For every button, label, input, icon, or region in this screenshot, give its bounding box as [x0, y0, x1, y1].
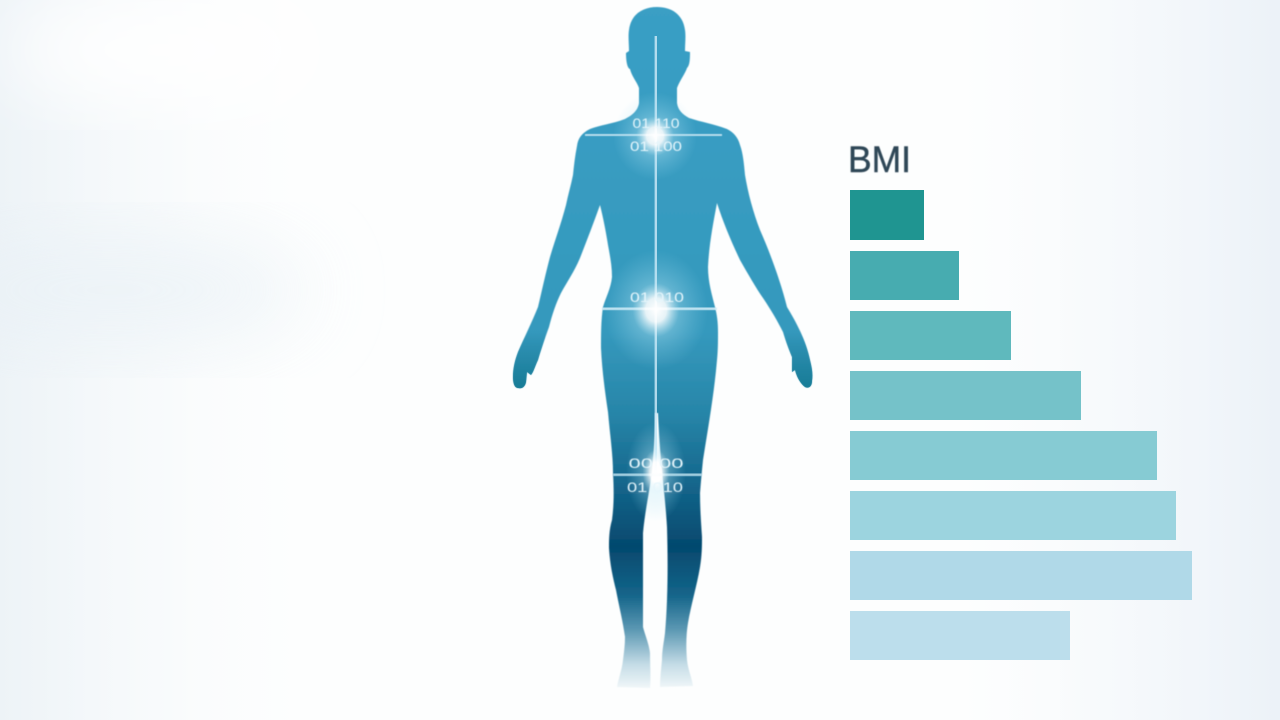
shoulder measuring line — [585, 134, 722, 136]
binary readouts: 01 010 — [630, 289, 684, 305]
binary readouts — [627, 115, 684, 495]
hand shading — [513, 336, 812, 388]
knee measuring line — [613, 474, 702, 476]
bar 3 — [850, 311, 1011, 360]
binary readouts: 01 010 — [627, 479, 683, 495]
bar 4 — [850, 371, 1081, 420]
binary readouts: 01 100 — [630, 138, 682, 154]
body silhouette — [513, 7, 812, 688]
knee glow — [626, 422, 686, 522]
human body figure — [505, 7, 820, 688]
waist glow — [604, 250, 708, 370]
BMI heading: BMI — [848, 139, 911, 180]
bar 2 — [850, 251, 959, 300]
binary readouts: 01 110 — [632, 115, 680, 131]
bar 1 — [850, 190, 924, 240]
shoulder glow — [613, 92, 697, 180]
bar 7 — [850, 551, 1192, 600]
bar 6 — [850, 491, 1176, 540]
BMI bar chart — [850, 190, 1192, 660]
vertical spine line — [655, 36, 657, 476]
bar 5 — [850, 431, 1157, 480]
binary readouts: 00 00 — [628, 455, 684, 471]
waist measuring line — [602, 308, 717, 310]
bar 8 — [850, 611, 1070, 660]
